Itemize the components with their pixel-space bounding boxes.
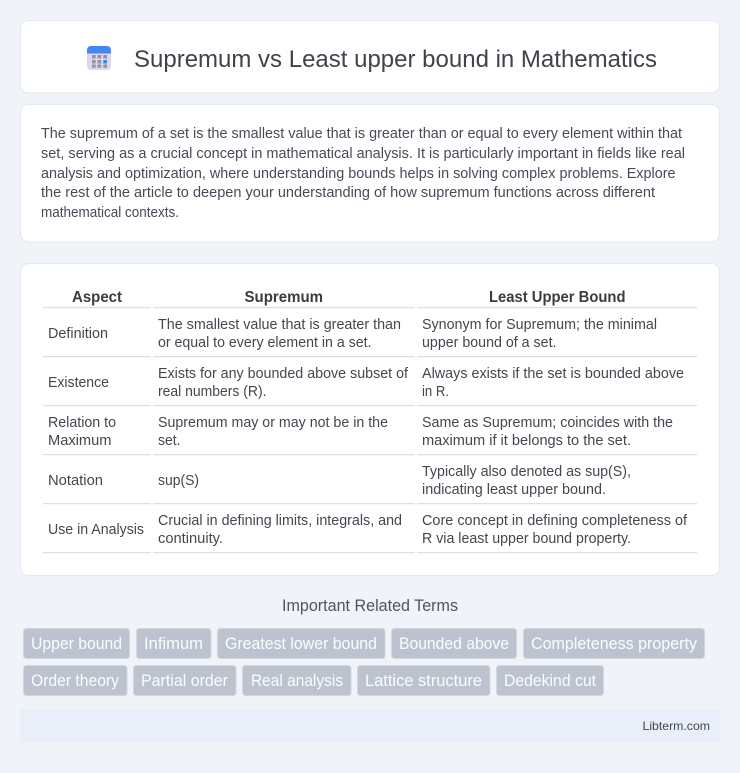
table row: Notation: Typically also denoted as sup(S), xyxy=(422,464,631,480)
tag group: related terms: Completeness property xyxy=(531,635,698,653)
table row: Use in Analysis: R via least upper bound property. xyxy=(422,531,631,547)
text block: introduction paragraph: analysis and optimization, where understanding bounds helps in solving complex problems. Explore xyxy=(41,166,676,182)
footer xyxy=(20,709,720,743)
table row: Use in Analysis: continuity. xyxy=(158,531,223,547)
panel: header xyxy=(20,20,720,93)
table row: Relation to Maximum xyxy=(48,415,673,449)
table row: Definition: The smallest value that is greater than xyxy=(158,317,401,333)
heading: important related terms: Important Related Terms xyxy=(282,597,458,615)
text block: introduction paragraph: the rest of the article to deepen your understanding of how supremum functions across different xyxy=(41,185,655,201)
title: Supremum vs Least upper bound in Mathematics xyxy=(134,46,657,73)
panel: introduction xyxy=(20,104,720,242)
table row: Notation: sup(S) xyxy=(158,473,199,489)
tag group: related terms: Partial order xyxy=(141,672,228,690)
tag group: related terms: Greatest lower bound xyxy=(225,635,377,653)
text block: introduction paragraph: The supremum of a set is the smallest value that is greater than or equal to every element within that xyxy=(41,126,682,142)
table row: Relation to Maximum: Relation to xyxy=(48,415,116,431)
table row: Notation: indicating least upper bound. xyxy=(422,482,606,498)
table row: Use in Analysis: Crucial in defining limits, integrals, and xyxy=(158,513,402,529)
table row: Relation to Maximum: Maximum xyxy=(48,433,112,449)
table row: Use in Analysis: Use in Analysis xyxy=(48,522,144,538)
table row: Use in Analysis xyxy=(48,513,688,547)
panel: comparison table xyxy=(20,264,720,576)
table row: Definition xyxy=(48,317,657,351)
tag group: related terms: Order theory xyxy=(31,672,120,690)
table row: Definition: Synonym for Supremum; the minimal xyxy=(422,317,657,333)
table row: Existence: Existence xyxy=(48,375,109,391)
table header row: Aspect xyxy=(72,289,123,306)
tag group: related terms: Dedekind cut xyxy=(504,672,596,690)
table row: Definition: upper bound of a set. xyxy=(422,335,556,351)
table row: Definition: or equal to every element in a set. xyxy=(158,335,372,351)
table row: Relation to Maximum: Same as Supremum; coincides with the xyxy=(422,415,673,431)
text block: introduction paragraph: mathematical contexts. xyxy=(41,205,179,221)
table row: Notation: Notation xyxy=(48,473,103,489)
tag group: related terms: Bounded above xyxy=(399,635,509,653)
footer: Libterm.com xyxy=(642,719,710,733)
text block: introduction paragraph xyxy=(41,126,685,221)
table row: Existence: Exists for any bounded above subset of xyxy=(158,366,409,382)
text block: introduction paragraph: set, serving as a crucial concept in mathematical analysis. It is particularly important in fields like real xyxy=(41,146,685,162)
tag group: related terms: Real analysis xyxy=(251,672,343,690)
table row: Existence xyxy=(48,366,684,400)
tag group: related terms xyxy=(24,628,704,696)
table row: Existence: real numbers (R). xyxy=(158,384,266,400)
table row: Existence: in R. xyxy=(422,384,449,400)
table row: Use in Analysis: Core concept in defining completeness of xyxy=(422,513,688,529)
table row: Notation xyxy=(48,464,631,498)
tag group: related terms: Infimum xyxy=(144,635,203,653)
table header row: Supremum xyxy=(244,289,323,306)
table row: Relation to Maximum: maximum if it belongs to the set. xyxy=(422,433,631,449)
tag group: related terms: Lattice structure xyxy=(365,672,482,690)
table row: Relation to Maximum: set. xyxy=(158,433,180,449)
table header row: Least Upper Bound xyxy=(489,289,626,306)
tag group: related terms: Upper bound xyxy=(31,635,122,653)
icon: calendar xyxy=(87,46,111,70)
table row: Definition: Definition xyxy=(48,326,108,342)
table row: Existence: Always exists if the set is bounded above xyxy=(422,366,684,382)
table header row xyxy=(72,289,626,306)
table row: Relation to Maximum: Supremum may or may not be in the xyxy=(158,415,388,431)
